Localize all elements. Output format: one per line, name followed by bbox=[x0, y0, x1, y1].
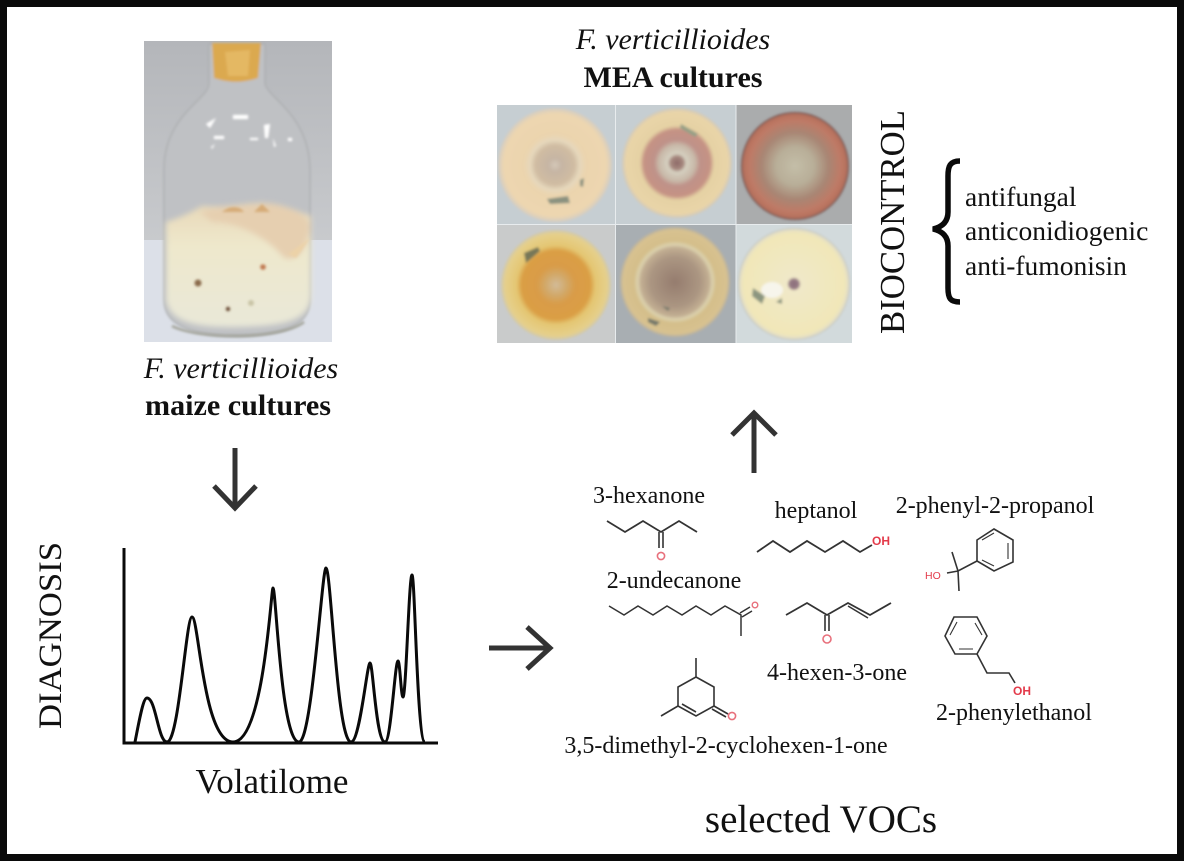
compound: 3-hexanone bbox=[593, 483, 705, 560]
label: BIOCONTROL: BIOCONTROL bbox=[873, 110, 912, 334]
biocontrol effects list: antifungal bbox=[965, 181, 1077, 212]
caption: MEA cultures bbox=[575, 23, 770, 94]
plate 3 bbox=[741, 112, 849, 220]
compound: 2-phenyl-2-propanol bbox=[896, 493, 1095, 591]
compound: heptanol bbox=[757, 498, 890, 552]
compound: 3,5-dimethyl-2-cyclohexen-1-one: 3,5-dimethyl-2-cyclohexen-1-one bbox=[564, 733, 888, 759]
culture spots bbox=[194, 280, 202, 286]
biocontrol effects list: anti-fumonisin bbox=[965, 250, 1127, 281]
plate 1 bbox=[498, 108, 612, 222]
compound: 2-undecanone: 2-undecanone bbox=[607, 568, 741, 594]
label: Volatilome: Volatilome bbox=[196, 762, 348, 801]
arrow: volatilome to VOCs bbox=[489, 627, 550, 669]
chart: volatilome chromatogram bbox=[124, 548, 438, 743]
culture mass bbox=[166, 203, 311, 327]
biocontrol effects list: anticonidiogenic bbox=[965, 215, 1148, 246]
compound: 3-hexanone: 3-hexanone bbox=[593, 483, 705, 509]
brace bbox=[933, 161, 960, 302]
biocontrol effects list bbox=[965, 181, 1148, 281]
compound: 4-hexen-3-one: 4-hexen-3-one bbox=[767, 660, 907, 686]
plate 4 bbox=[501, 230, 611, 340]
label: DIAGNOSIS: DIAGNOSIS bbox=[33, 542, 69, 729]
compound: 2-phenylethanol bbox=[936, 617, 1092, 726]
compound: heptanol: OH bbox=[872, 534, 890, 548]
compound: 2-phenyl-2-propanol: 2-phenyl-2-propanol bbox=[896, 493, 1095, 519]
caption: maize cultures: maize cultures bbox=[145, 389, 331, 422]
compound: heptanol: heptanol bbox=[775, 498, 858, 524]
compound: 2-phenylethanol: OH bbox=[1013, 684, 1031, 698]
compound: 2-phenylethanol: 2-phenylethanol bbox=[936, 700, 1092, 726]
caption: maize cultures bbox=[143, 352, 338, 422]
bottle base bbox=[172, 322, 304, 336]
arrow: up to MEA cultures bbox=[732, 413, 776, 473]
arrow: down from maize cultures bbox=[214, 448, 256, 508]
compound: 2-phenyl-2-propanol: HO bbox=[925, 570, 941, 582]
plate 2 bbox=[622, 108, 732, 218]
plate 6 bbox=[738, 228, 850, 340]
caption: MEA cultures: F. verticillioides bbox=[575, 23, 770, 56]
compound: 3,5-dimethyl-2-cyclohexen-1-one bbox=[564, 658, 888, 759]
caption: maize cultures: F. verticillioides bbox=[143, 352, 338, 385]
caption: MEA cultures: MEA cultures bbox=[584, 61, 762, 94]
compound: 2-undecanone bbox=[607, 568, 758, 636]
plate marks bbox=[547, 178, 584, 204]
cork bbox=[212, 43, 261, 82]
compound: 4-hexen-3-one bbox=[767, 603, 907, 686]
highlights bbox=[206, 115, 292, 149]
photo: maize culture bottle bbox=[144, 41, 332, 342]
photo: MEA culture plates bbox=[497, 105, 852, 343]
plate 5 bbox=[620, 227, 730, 337]
bottle glass bbox=[164, 44, 310, 336]
label: selected VOCs: selected VOCs bbox=[705, 798, 937, 841]
